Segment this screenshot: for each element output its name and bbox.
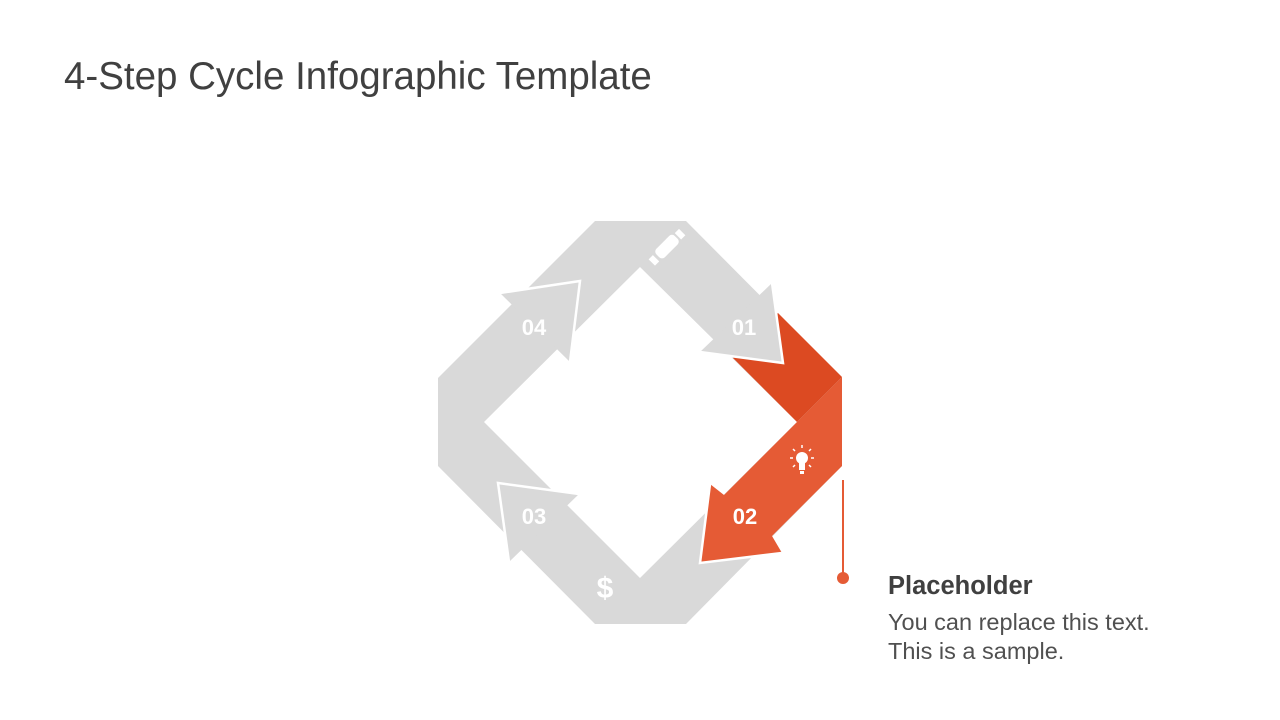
icon: light bulb: [790, 445, 814, 474]
connector line: [837, 480, 849, 584]
step 2 orange arrow: [700, 313, 842, 563]
placeholder text block: [888, 572, 1150, 664]
title: 4-Step Cycle Infographic Template: [64, 55, 652, 98]
placeholder text block: Placeholder: [888, 572, 1033, 600]
ring: gray octagon: [438, 221, 842, 624]
placeholder text block: You can replace this text.: [888, 609, 1150, 635]
labels: [522, 315, 757, 529]
labels: 02: [733, 504, 757, 529]
arrow 01 head: [700, 283, 783, 363]
icon: handshake: [647, 227, 686, 266]
labels: 03: [522, 504, 546, 529]
arrow 03 head: [498, 483, 579, 562]
labels: 01: [732, 315, 756, 340]
labels: 04: [522, 315, 547, 340]
icon: dollar: $: [597, 572, 614, 605]
placeholder text block: This is a sample.: [888, 638, 1064, 664]
arrow 04 head: [500, 281, 580, 362]
